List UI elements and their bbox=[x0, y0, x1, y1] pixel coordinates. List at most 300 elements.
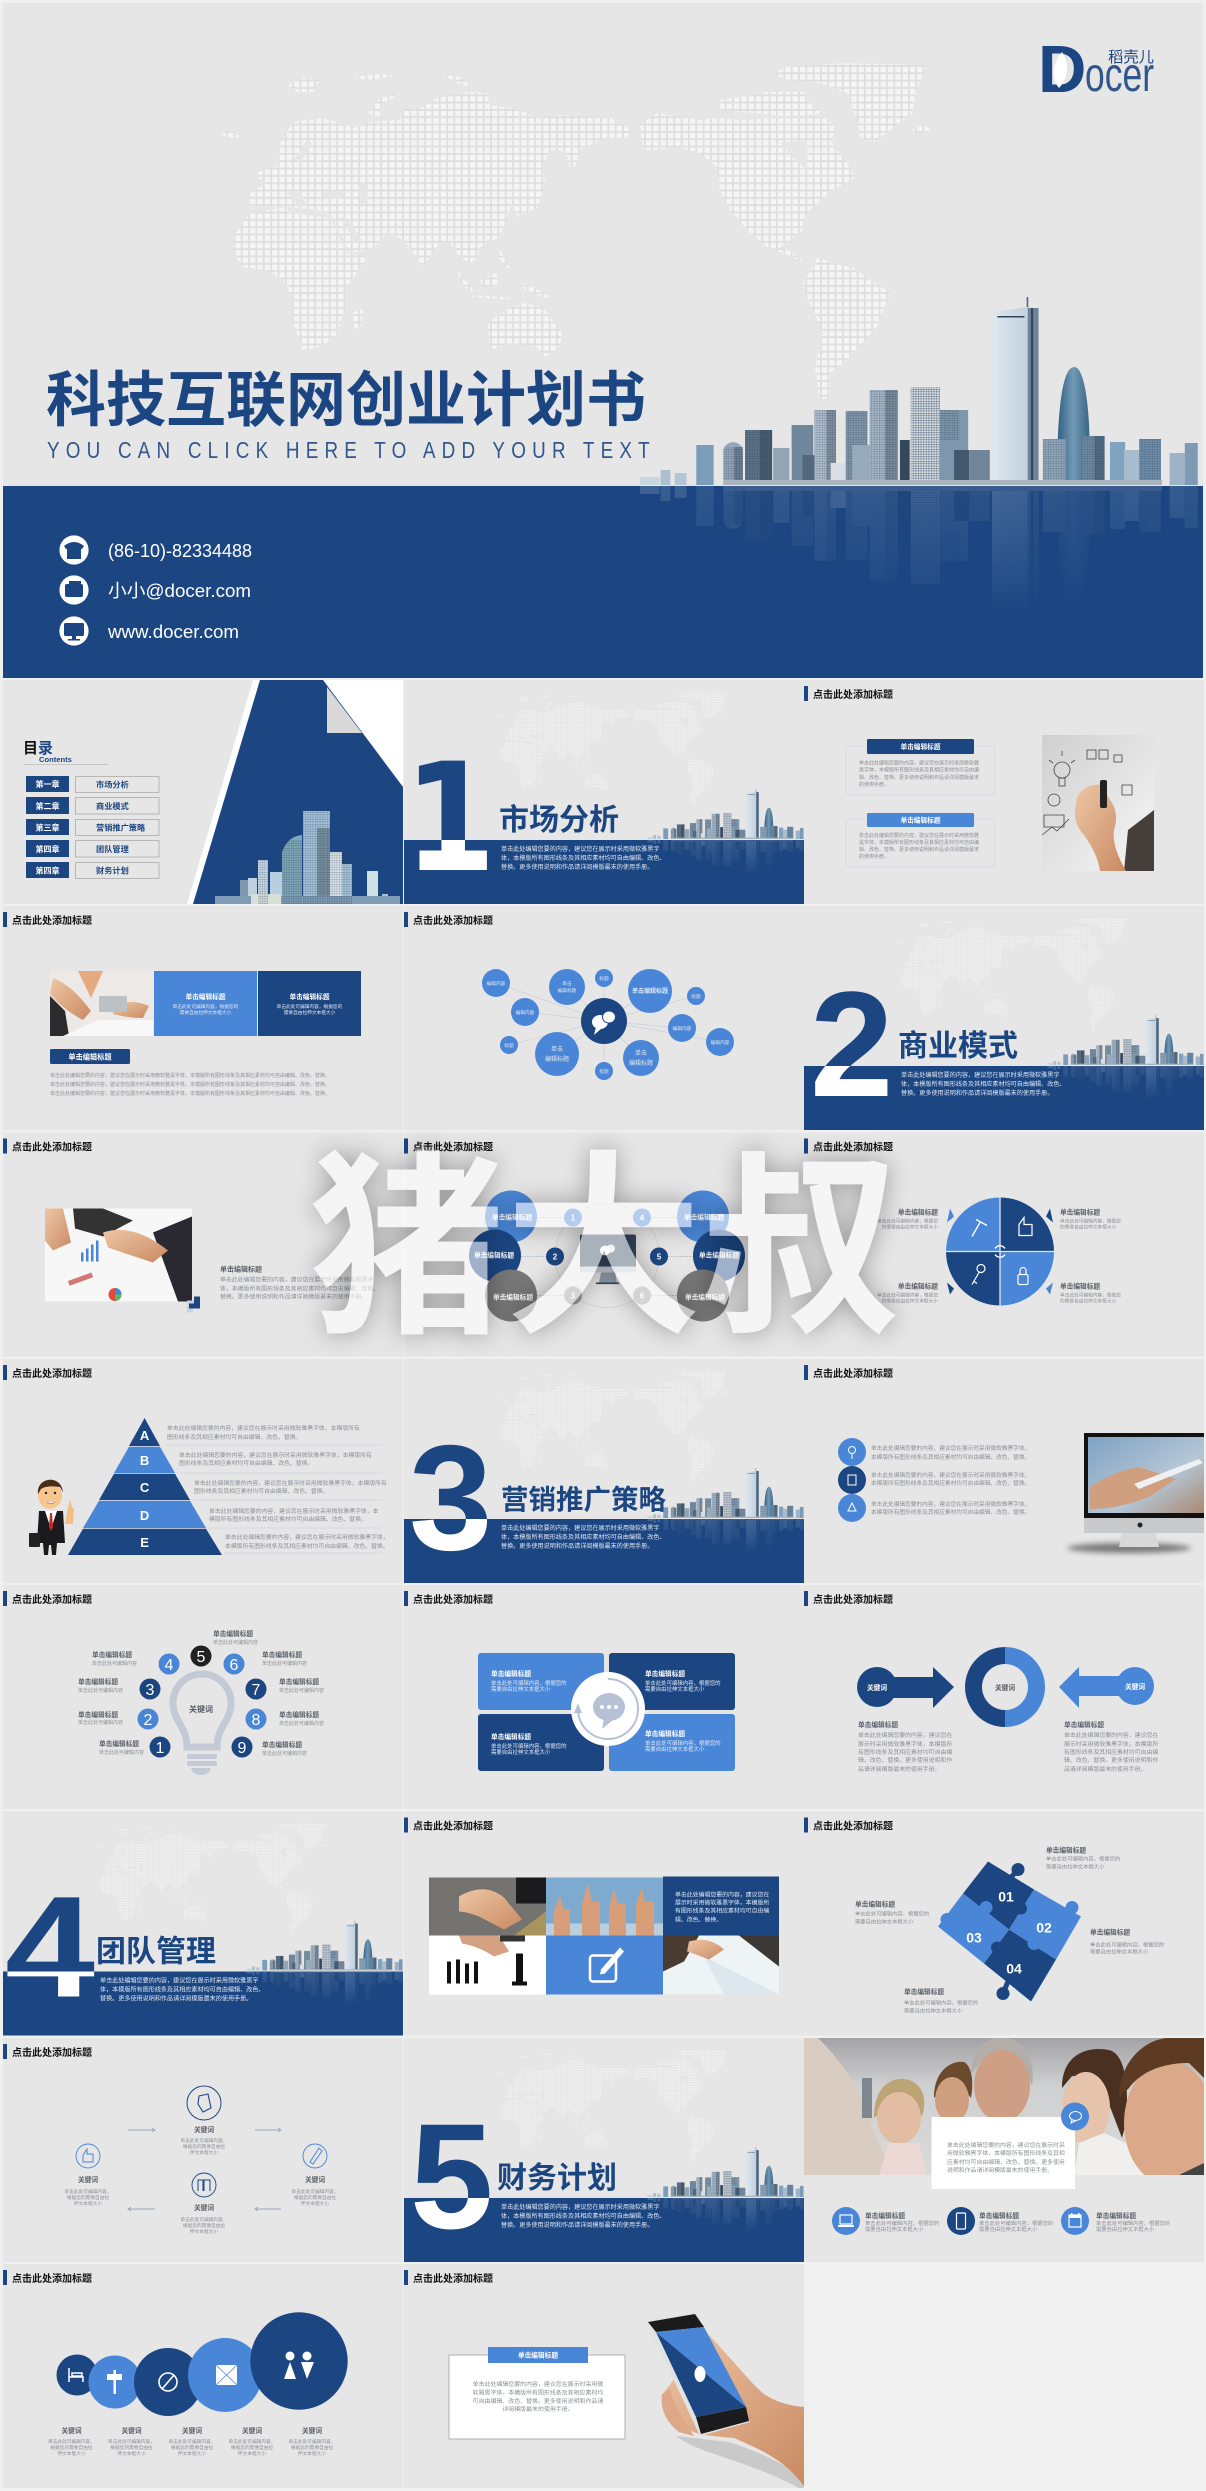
label: bottom: 需要自由拉伸文本框大小 bbox=[904, 2006, 963, 2014]
number 3: 3 bbox=[409, 1414, 492, 1582]
labels: 单击此处可编辑内容 bbox=[262, 1750, 307, 1757]
right text: 单击编辑标题 bbox=[1064, 1720, 1104, 1729]
band bbox=[404, 1519, 804, 1583]
icon tile: pen bbox=[546, 1936, 663, 1994]
text box 2: 单击此处编辑您要的内容，建议您在展示时采用微软雅 bbox=[859, 832, 979, 839]
panel: opposing arrows and donut bbox=[804, 1585, 1204, 1809]
white callout: 单击此处编辑您要的内容，建议您在展示时采 bbox=[947, 2141, 1065, 2149]
node: left middle bbox=[469, 1230, 521, 1282]
photo: hand drawing sketches bbox=[1042, 735, 1154, 871]
label: top left bbox=[877, 1208, 938, 1230]
labels: 伸文本框大小 bbox=[117, 2450, 146, 2457]
number 1: 1 bbox=[404, 732, 496, 906]
number 5 bbox=[414, 2124, 490, 2230]
logo: Docer: ocer bbox=[1085, 49, 1154, 102]
tile: top left: 单击此处可编辑内容，根据您的 bbox=[491, 1679, 566, 1687]
text E: 本模版所有图形线条及其相应素材均可自由编辑、改色、替换。 bbox=[225, 1542, 389, 1550]
watermark: 猪大叔 bbox=[308, 1139, 899, 1359]
map bbox=[496, 691, 729, 806]
tile: bottom right: 单击此处可编辑内容，根据您的 bbox=[645, 1739, 720, 1747]
subtitle: YOU CAN CLICK HERE TO ADD YOUR TEXT bbox=[47, 438, 650, 463]
panel: section 3 marketing strategy bbox=[404, 1359, 804, 1583]
labels: 根据您的需要自由拉 bbox=[110, 2444, 153, 2451]
chapter 2: 商业模式 bbox=[96, 801, 129, 811]
pyramid: D bbox=[140, 1508, 149, 1523]
chapter 3 bbox=[26, 819, 159, 836]
section body: 体，本模版所有图形线条及其相应素材均可自由编辑、改色、 bbox=[501, 1533, 666, 1541]
icon: hammer bbox=[972, 1220, 987, 1236]
panel: table of contents bbox=[3, 680, 403, 904]
map bbox=[896, 917, 1129, 1032]
box: light blue: 需要自由拉伸文本框大小 bbox=[180, 1009, 232, 1016]
label: top bbox=[1046, 1846, 1120, 1870]
label: bottom right: 的需要自由拉伸文本框大小 bbox=[1060, 1298, 1117, 1304]
label: top: 单击此处可编辑内容，根据您的 bbox=[1046, 1854, 1120, 1862]
chapter 5: 第四章 bbox=[36, 866, 60, 876]
heading bbox=[804, 686, 893, 701]
panel: bubble mind map bbox=[404, 906, 804, 1130]
label: right: 单击此处可编辑内容，根据您的 bbox=[1090, 1940, 1164, 1948]
icon: bulb bbox=[173, 1674, 231, 1775]
heading: contents: Contents bbox=[39, 755, 72, 764]
text B: 单击此处编辑您要的内容，建议您在展示时采用微软雅黑字体，本模版所有 bbox=[179, 1451, 372, 1459]
mind map: 标题 bbox=[691, 993, 701, 1000]
pyramid: B bbox=[140, 1453, 149, 1468]
heading bbox=[404, 1818, 493, 1832]
labels: 单击编辑标题 bbox=[92, 1650, 132, 1659]
section title: 商业模式 bbox=[898, 1030, 1018, 1063]
chapter 1: 市场分析 bbox=[96, 780, 129, 790]
left arrow bbox=[857, 1667, 954, 1708]
icon: thumb up bbox=[1019, 1218, 1032, 1236]
tile: top left bbox=[478, 1653, 604, 1710]
connector lines bbox=[521, 1218, 699, 1296]
heading bbox=[3, 1591, 92, 1606]
box: dark blue: 单击编辑标题 bbox=[289, 992, 330, 1001]
buildings bbox=[215, 811, 400, 904]
heading: 点击此处添加标题 bbox=[12, 1593, 92, 1606]
heading bbox=[3, 2044, 92, 2059]
right text: 有图形线条及其相应素材均可自由编 bbox=[1064, 1748, 1158, 1756]
white callout: 应素材均可自由编辑、改色、替换。更多使用 bbox=[947, 2158, 1065, 2166]
mind map: 标题 bbox=[599, 1068, 609, 1075]
numbered circles: 4 bbox=[165, 1657, 174, 1674]
chapter 2 bbox=[26, 797, 159, 814]
node: top: 根据您的需要自由拉 bbox=[183, 2143, 225, 2150]
heading: 点击此处添加标题 bbox=[12, 914, 92, 927]
item: laptop: 单击编辑标题 bbox=[865, 2211, 905, 2220]
heading bbox=[404, 1591, 493, 1606]
heading: contents: 目录 bbox=[23, 740, 53, 757]
label: top: 需要自由拉伸文本框大小 bbox=[1046, 1862, 1105, 1870]
text box 1: 辑、改色、替换。更多使用说明和作品请详阅模版最末 bbox=[859, 774, 979, 781]
labels: 单击此处可编辑内容， bbox=[48, 2438, 95, 2445]
labels: 伸文本框大小 bbox=[57, 2450, 86, 2457]
node: right bottom bbox=[677, 1270, 729, 1322]
label: top right: 单击此处可编辑内容，根据您 bbox=[1060, 1218, 1121, 1224]
folded corner bbox=[327, 687, 362, 733]
chapter 3: 第三章 bbox=[36, 822, 60, 832]
labels: 根据您的需要自由拉 bbox=[291, 2444, 333, 2451]
node: right top bbox=[677, 1190, 729, 1242]
item 2: 本模版所有图形线条及其相应素材均可自由编辑、改色、替换。 bbox=[871, 1479, 1030, 1487]
panel: photo with two blue boxes bbox=[3, 906, 403, 1130]
center arrows bbox=[995, 1246, 1005, 1257]
heading: 点击此处添加标题 bbox=[413, 1593, 493, 1606]
number 1: 1 bbox=[404, 732, 496, 906]
tile: bottom left bbox=[478, 1714, 604, 1771]
panel: photo with text bbox=[3, 1132, 403, 1356]
photo: four people bbox=[804, 2037, 1206, 2185]
label: bottom left: 的需要自由拉伸文本框大小 bbox=[882, 1298, 938, 1304]
white callout: 用微软雅黑字体，本模版所有图形线条及其相 bbox=[947, 2149, 1065, 2157]
box: dark blue: 需要自由拉伸文本框大小 bbox=[284, 1009, 336, 1016]
item: phone: 单击编辑标题 bbox=[979, 2211, 1019, 2220]
text block bbox=[220, 1264, 379, 1300]
puzzle pieces: 01 bbox=[998, 1888, 1014, 1904]
labels: 关键词 bbox=[121, 2426, 142, 2435]
panel: cover slide bbox=[3, 3, 1203, 678]
text box 1: 的使用手册。 bbox=[859, 781, 889, 788]
heading bbox=[3, 1365, 92, 1380]
left text: 单击编辑标题 bbox=[858, 1720, 898, 1729]
box: light blue: 单击此处可编辑内容，根据您的 bbox=[173, 1003, 239, 1010]
labels: 单击此处可编辑内容 bbox=[92, 1660, 137, 1667]
text E bbox=[224, 1533, 389, 1553]
heading: 点击此处添加标题 bbox=[413, 1820, 493, 1832]
mind map: 标题 bbox=[504, 1042, 514, 1049]
node: right top: 单击编辑标题 bbox=[684, 1212, 724, 1222]
mind map: 编辑内容 bbox=[673, 1025, 692, 1032]
panel: light bulb bbox=[3, 1585, 403, 1809]
label: bottom left: 单击此处可编辑内容，根据您 bbox=[877, 1292, 938, 1298]
right text: 单击此处编辑您要的内容，建议您在 bbox=[1064, 1731, 1158, 1739]
white corner bbox=[187, 680, 403, 904]
number 2: 2 bbox=[810, 960, 893, 1128]
node: bottom: 根据您的需要自由拉 bbox=[183, 2222, 225, 2229]
item 1 bbox=[838, 1438, 1030, 1466]
tile: bottom left: 需要自由拉伸文本框大小 bbox=[491, 1748, 551, 1756]
text tile: 辑、改色、替换。 bbox=[675, 1916, 722, 1924]
dotted world map bbox=[220, 63, 932, 400]
heading bbox=[804, 1138, 893, 1154]
heading bbox=[804, 1818, 893, 1832]
text A bbox=[166, 1424, 382, 1445]
circle 2: signpost bbox=[88, 2356, 142, 2408]
text tile bbox=[663, 1876, 779, 1936]
labels: 关键词 bbox=[182, 2426, 202, 2435]
item: calendar: 单击此处可编辑内容，根据您的 bbox=[1096, 2219, 1170, 2227]
chapter 4: 团队管理 bbox=[96, 844, 129, 854]
item: laptop: 需要自由拉伸文本框大小 bbox=[865, 2225, 924, 2233]
pie chart bbox=[946, 1198, 1054, 1306]
chapter 3: 营销推广策略 bbox=[96, 822, 146, 832]
heading: 点击此处添加标题 bbox=[12, 2046, 92, 2059]
body text: 单击此处编辑您要的内容，建议您在展示时采用微软雅黑字体，本模版所有图形线条及其相应素材均可自由编辑、改色、替换。 bbox=[50, 1072, 330, 1079]
label: bottom left bbox=[877, 1282, 938, 1304]
node: bottom bbox=[181, 2173, 227, 2235]
node: left middle: 单击编辑标题 bbox=[474, 1250, 514, 1260]
text B: 图形线条及其相应素材均可自由编辑、改色、替换。 bbox=[179, 1459, 313, 1467]
label: bottom right: 单击此处可编辑内容，根据您 bbox=[1060, 1292, 1121, 1298]
section body: 单击此处编辑您要的内容，建议您在展示时采用微软雅黑字 bbox=[901, 1071, 1059, 1079]
white callout: 说明和作品请详阅模版最末的使用手册。 bbox=[947, 2166, 1053, 2174]
title: 科技互联网创业计划书 bbox=[46, 367, 646, 434]
tile: bottom right: 单击编辑标题 bbox=[645, 1729, 685, 1738]
tile: top right bbox=[609, 1653, 735, 1710]
section body: 体，本模版所有图形线条及其相应素材均可自由编辑、改色、 bbox=[100, 1986, 265, 1994]
corner arrow icon bbox=[187, 1296, 200, 1312]
panel: puzzle bbox=[804, 1812, 1204, 2036]
text D: 模版所有图形线条及其相应素材均可自由编辑、改色、替换。 bbox=[209, 1515, 367, 1523]
labels: 单击编辑标题 bbox=[279, 1677, 319, 1686]
logo: Docer: 稻壳儿 bbox=[1108, 49, 1154, 66]
item: laptop: 单击此处可编辑内容，根据您的 bbox=[865, 2219, 939, 2227]
subtitle pill bbox=[50, 1049, 130, 1064]
heading: 点击此处添加标题 bbox=[813, 688, 893, 701]
section body bbox=[501, 2203, 666, 2229]
label: bottom bbox=[904, 1987, 978, 2014]
subtitle pill: 单击编辑标题 bbox=[68, 1052, 112, 1062]
labels: 单击编辑标题 bbox=[213, 1629, 253, 1638]
band bbox=[404, 840, 804, 904]
circle 5: restroom bbox=[250, 2312, 348, 2410]
numbered dots: 2 bbox=[553, 1252, 558, 1262]
item: phone: 单击此处可编辑内容，根据您的 bbox=[979, 2219, 1053, 2227]
blue footer band bbox=[3, 486, 1203, 678]
photo: documents bbox=[663, 1936, 779, 1994]
section body bbox=[901, 1071, 1066, 1097]
text box 2: 黑字体，本模版所有图形线条及其相应素材均可自由编 bbox=[859, 839, 979, 846]
mind map: 单击 bbox=[635, 1049, 647, 1057]
right text bbox=[1064, 1720, 1158, 1773]
number 5: 5 bbox=[410, 2092, 493, 2260]
number 4 bbox=[7, 1897, 94, 1996]
label: bottom left: 单击编辑标题 bbox=[898, 1282, 938, 1290]
donut bbox=[965, 1647, 1045, 1727]
text block: 体，本模版所有图形线条及其相应素材均可自由编辑、改色、 bbox=[220, 1284, 379, 1292]
label: bottom right: 单击编辑标题 bbox=[1060, 1282, 1100, 1290]
section body bbox=[501, 845, 666, 871]
icon: monitor bbox=[580, 1234, 636, 1284]
circle 3: no smoking bbox=[134, 2348, 202, 2416]
heading bbox=[3, 1138, 92, 1154]
number 3: 3 bbox=[409, 1414, 492, 1582]
mind map: 编辑内容 bbox=[487, 980, 506, 987]
section body: 单击此处编辑您要的内容，建议您在展示时采用微软雅黑字 bbox=[100, 1976, 258, 1984]
tile: bottom right bbox=[609, 1714, 735, 1771]
icon: key bbox=[972, 1264, 985, 1284]
numbered circles: 1 bbox=[156, 1740, 165, 1757]
heading bbox=[804, 1591, 893, 1606]
labels: 伸文本框大小 bbox=[298, 2450, 326, 2457]
node: right: 关键词 bbox=[305, 2175, 325, 2184]
item: phone bbox=[947, 2207, 1053, 2235]
text C bbox=[193, 1479, 387, 1500]
numbered dots bbox=[546, 1208, 668, 1304]
node: right: 单击此处可编辑内容， bbox=[292, 2188, 338, 2195]
node: left bottom: 单击编辑标题 bbox=[493, 1292, 533, 1302]
labels: 单击编辑标题 bbox=[262, 1650, 302, 1659]
skyline bbox=[648, 1468, 804, 1546]
heading bbox=[3, 2270, 92, 2285]
section body: 体，本模版所有图形线条及其相应素材均可自由编辑、改色、 bbox=[901, 1080, 1066, 1088]
panel: four-part pie bbox=[804, 1132, 1204, 1356]
panel: team photo with callout bbox=[804, 2037, 1206, 2262]
pyramid: C bbox=[140, 1480, 150, 1495]
heading: 点击此处添加标题 bbox=[12, 2272, 92, 2285]
mind map bbox=[482, 969, 734, 1080]
node: right middle bbox=[693, 1230, 745, 1282]
node: bottom: 伸文本框大小 bbox=[190, 2228, 218, 2235]
text card: 单击编辑标题 bbox=[518, 2350, 558, 2360]
heading: 点击此处添加标题 bbox=[413, 2272, 493, 2285]
hand and phone bbox=[646, 2313, 804, 2488]
labels: 单击此处可编辑内容 bbox=[213, 1639, 258, 1646]
label: right: 需要自由拉伸文本框大小 bbox=[1090, 1948, 1149, 1956]
heading: 点击此处添加标题 bbox=[813, 1367, 893, 1380]
item: laptop bbox=[832, 2207, 939, 2235]
panel: section 2 business model bbox=[804, 906, 1204, 1130]
node: left: 关键词 bbox=[78, 2175, 98, 2184]
item 3 bbox=[838, 1494, 1030, 1522]
label: top right: 的需要自由拉伸文本框大小 bbox=[1060, 1224, 1117, 1230]
panel: pyramid with cartoon man bbox=[3, 1359, 403, 1583]
panel: section 5 financial plan bbox=[404, 2038, 804, 2262]
contact: website: www.docer.com bbox=[107, 622, 239, 642]
heading: 点击此处添加标题 bbox=[12, 1140, 92, 1154]
node: left top bbox=[485, 1190, 537, 1242]
labels: 伸文本框大小 bbox=[178, 2450, 206, 2457]
text box 1: 单击此处编辑您要的内容，建议您在展示时采用微软雅 bbox=[859, 760, 979, 766]
numbered circles: 6 bbox=[230, 1657, 239, 1674]
skyline bbox=[1048, 1015, 1204, 1094]
label: top right bbox=[1060, 1208, 1121, 1230]
tile: bottom right: 需要自由拉伸文本框大小 bbox=[645, 1745, 705, 1753]
labels: 关键词 bbox=[302, 2426, 322, 2435]
numbered circles: 5 bbox=[197, 1649, 206, 1666]
node: top: 伸文本框大小 bbox=[190, 2149, 218, 2156]
skyline bbox=[246, 1920, 403, 1999]
section title: 团队管理 bbox=[96, 1936, 216, 1968]
text box 2: 辑、改色、替换。更多使用说明和作品请详阅模版最末 bbox=[859, 846, 979, 853]
text tile: 单击此处编辑您要的内容，建议您在 bbox=[675, 1890, 769, 1898]
logo: Docer bbox=[1038, 32, 1154, 107]
item 3: 单击此处编辑您要的内容，建议您在展示时采用微软雅黑字体， bbox=[871, 1500, 1030, 1508]
label: top left: 单击此处可编辑内容，根据您 bbox=[877, 1218, 938, 1224]
node: bottom: 关键词 bbox=[194, 2203, 214, 2212]
panel: monitor with six numbered nodes bbox=[404, 1132, 804, 1356]
text box 1 bbox=[846, 739, 995, 795]
section body: 单击此处编辑您要的内容，建议您在展示时采用微软雅黑字 bbox=[501, 2203, 659, 2211]
node: left: 单击此处可编辑内容， bbox=[65, 2188, 111, 2195]
iMac bbox=[1067, 1433, 1204, 1553]
section title: 财务计划 bbox=[497, 2162, 617, 2195]
band bbox=[804, 1066, 1204, 1130]
labels bbox=[78, 1629, 324, 1757]
labels: 单击编辑标题 bbox=[78, 1677, 118, 1686]
number 5: 5 bbox=[410, 2092, 493, 2260]
text card: 软雅黑字体，本模版所有图形线条及其相应素材均 bbox=[473, 2388, 603, 2396]
labels: 单击此处可编辑内容 bbox=[78, 1719, 123, 1726]
mind map: 标题 bbox=[599, 975, 609, 982]
contact: phone: (86-10)-82334488 bbox=[108, 541, 252, 561]
pyramid: A bbox=[140, 1428, 150, 1443]
numbered circles: 3 bbox=[146, 1682, 155, 1699]
left text: 品请详阅模版最末的使用手册。 bbox=[858, 1765, 940, 1773]
label: left: 单击此处可编辑内容，根据您的 bbox=[855, 1910, 929, 1918]
right text: 品请详阅模版最末的使用手册。 bbox=[1064, 1765, 1146, 1773]
node: top: 单击此处可编辑内容， bbox=[181, 2137, 227, 2144]
text box 1: 单击编辑标题 bbox=[900, 742, 941, 751]
label: bottom: 单击此处可编辑内容，根据您的 bbox=[904, 1998, 978, 2006]
text tile: 展示时采用微软雅黑字体，本模版所 bbox=[675, 1898, 769, 1906]
contact: email bbox=[59, 575, 251, 605]
right arrow: 关键词 bbox=[1125, 1682, 1145, 1691]
node: right: 根据您的需要自由拉 bbox=[294, 2194, 336, 2201]
tile: top right: 单击编辑标题 bbox=[645, 1669, 685, 1678]
numbered dots: 6 bbox=[640, 1292, 645, 1300]
section body: 体，本模版所有图形线条及其相应素材均可自由编辑、改色、 bbox=[501, 2212, 666, 2220]
tile: top right: 需要自由拉伸文本框大小 bbox=[645, 1685, 705, 1693]
pyramid: E bbox=[140, 1535, 149, 1550]
box: light blue: 单击编辑标题 bbox=[185, 992, 226, 1001]
numbered dots: 3 bbox=[571, 1292, 576, 1300]
mind map: 单击 bbox=[562, 980, 572, 987]
logo: Docer: D bbox=[1038, 32, 1086, 107]
node: left: 根据您的需要自由拉 bbox=[67, 2194, 109, 2201]
text card: 可自由编辑、改色、替换。更多使用说明和作品请 bbox=[473, 2397, 603, 2405]
circle 4: envelope bbox=[188, 2338, 262, 2412]
left text: 单击此处编辑您要的内容，建议您在 bbox=[858, 1731, 952, 1739]
number 4: 4 bbox=[5, 1866, 95, 2028]
panel: icon list with iMac bbox=[804, 1359, 1204, 1583]
section body bbox=[501, 1524, 666, 1550]
section body: 单击此处编辑您要的内容，建议您在展示时采用微软雅黑字 bbox=[501, 1524, 659, 1532]
box: dark blue bbox=[258, 971, 361, 1036]
photo: charts and hands bbox=[45, 1208, 192, 1302]
number 3 bbox=[412, 1444, 487, 1552]
labels: 单击此处可编辑内容 bbox=[78, 1687, 123, 1694]
text tile: 有图形线条及其相应素材均可自由编 bbox=[675, 1906, 769, 1914]
text B bbox=[178, 1451, 382, 1473]
item 1: 单击此处编辑您要的内容，建议您在展示时采用微软雅黑字体， bbox=[871, 1444, 1030, 1452]
numbered dots: 1 bbox=[571, 1214, 576, 1222]
text box 2 bbox=[846, 813, 995, 867]
numbered circles: 7 bbox=[252, 1682, 261, 1699]
chapter 2: 第二章 bbox=[36, 801, 60, 811]
left arrow: 关键词 bbox=[867, 1683, 887, 1692]
item 2: 单击此处编辑您要的内容，建议您在展示时采用微软雅黑字体， bbox=[871, 1471, 1030, 1479]
contact: website bbox=[59, 616, 239, 646]
label: left: 需要自由拉伸文本框大小 bbox=[855, 1918, 914, 1926]
heading bbox=[3, 912, 92, 927]
label: top: 单击编辑标题 bbox=[1046, 1846, 1086, 1854]
heading: 点击此处添加标题 bbox=[813, 1140, 893, 1154]
item: calendar: 单击编辑标题 bbox=[1096, 2211, 1136, 2220]
box: light blue bbox=[154, 971, 257, 1036]
text A: 单击此处编辑您要的内容，建议您在展示时采用微软雅黑字体，本模版所有 bbox=[167, 1424, 360, 1432]
panel: hand holding phone bbox=[404, 2264, 804, 2488]
item 2 bbox=[838, 1466, 1030, 1494]
text C: 图形线条及其相应素材均可自由编辑、改色、替换。 bbox=[194, 1487, 328, 1495]
skyline bbox=[640, 297, 1198, 485]
text E: 单击此处编辑您要的内容，建议您在展示时采用微软雅黑字体， bbox=[225, 1533, 389, 1541]
text D bbox=[208, 1507, 382, 1528]
pyramid bbox=[68, 1418, 222, 1555]
puzzle pieces: 02 bbox=[1036, 1920, 1052, 1936]
numbered circles: 8 bbox=[252, 1712, 261, 1729]
